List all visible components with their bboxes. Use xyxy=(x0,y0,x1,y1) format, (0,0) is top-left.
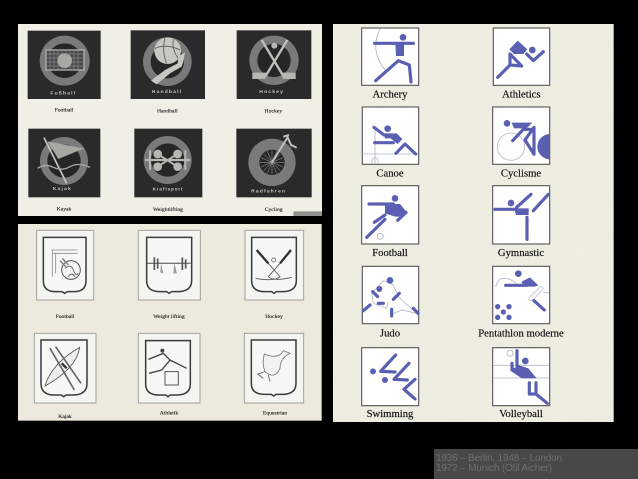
icon: Hockey: Hockey xyxy=(259,89,284,95)
label: Archery xyxy=(373,89,408,100)
label: Canoe xyxy=(376,168,404,179)
label: Kayak xyxy=(57,207,72,213)
icon: kayak shield xyxy=(34,333,96,403)
label: Football xyxy=(55,108,74,114)
label: Kajak xyxy=(58,414,72,420)
icon: weight lifting shield xyxy=(138,230,200,300)
icon: Cyclisme xyxy=(492,106,550,165)
label: Judo xyxy=(380,328,400,339)
icon: Athletics xyxy=(493,28,550,85)
icon: Judo xyxy=(362,266,419,324)
label: Cycling xyxy=(265,207,283,213)
label: Weight lifting xyxy=(153,313,185,320)
caption: 1936 – Berlin, 1948 – London xyxy=(436,453,562,464)
icon: Radfahren xyxy=(236,129,312,197)
icon: Pentathlon moderne xyxy=(493,266,550,324)
label: Weightlifting xyxy=(153,206,183,213)
label: Gymnastic xyxy=(498,248,544,259)
icon: Fußball: Fußball xyxy=(50,90,76,96)
caption xyxy=(434,449,638,479)
label: Football xyxy=(372,248,408,259)
icon: Kraftsport: Kraftsport xyxy=(153,186,183,191)
icon: Kajak xyxy=(28,129,100,197)
panel: 1972 Munich pictograms xyxy=(333,24,614,422)
icon: Gymnastic xyxy=(493,186,550,244)
label: Hockey xyxy=(265,109,282,115)
label: Athletics xyxy=(502,89,541,100)
icon: Fußball xyxy=(28,31,101,99)
icon: Football xyxy=(362,186,419,244)
panel: 1948 London shields xyxy=(18,224,322,421)
icon: Handball xyxy=(131,30,205,99)
label: Swimming xyxy=(367,409,414,420)
label: Pentathlon moderne xyxy=(478,328,564,339)
label: Volleyball xyxy=(499,409,543,420)
label: Handball xyxy=(157,109,178,115)
icon: equestrian shield xyxy=(244,333,304,403)
icon: Handball: Handball xyxy=(152,89,182,95)
label: Football xyxy=(56,314,75,320)
icon: hockey shield xyxy=(245,230,304,300)
icon: athletics shield xyxy=(138,333,200,403)
label: Cyclisme xyxy=(501,168,541,179)
icon: Kraftsport xyxy=(134,129,202,197)
icon: Kajak: Kajak xyxy=(53,186,72,192)
icon: Volleyball xyxy=(493,348,550,406)
label: Hockey xyxy=(265,314,283,320)
icon: football shield xyxy=(37,230,94,300)
label: Equestrian xyxy=(263,411,287,417)
icon: Canoe xyxy=(362,107,419,164)
icon: Swimming xyxy=(362,348,419,406)
caption: 1972 – Munich (Otil Aicher) xyxy=(436,463,552,474)
icon: Hockey xyxy=(237,30,311,99)
panel: 1936 Berlin dark pictograms xyxy=(18,24,322,216)
label: Athletik xyxy=(160,411,178,417)
icon: Archery xyxy=(362,28,419,85)
icon: Radfahren: Radfahren xyxy=(251,189,286,195)
